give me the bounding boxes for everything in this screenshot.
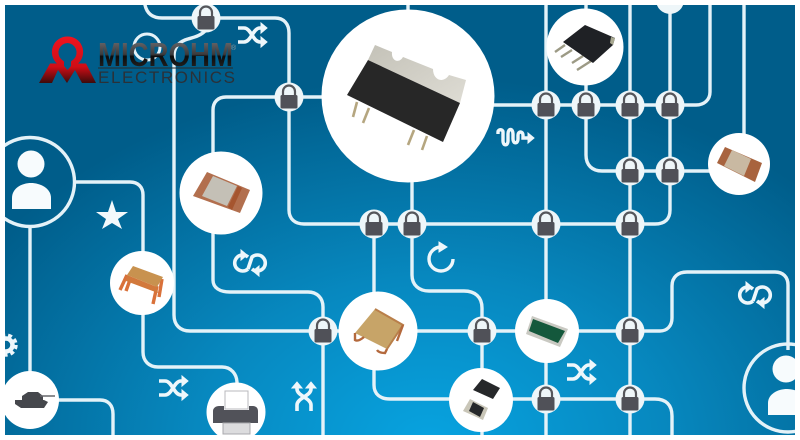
icon: shuffle top [238, 23, 267, 47]
icon: top edge node [657, 5, 683, 14]
icon: tank [1, 371, 59, 429]
logo wordmark: ELECTRONICS: ELECTRONICS [98, 68, 235, 87]
product: chip resistor left [180, 152, 262, 234]
product: green thick-film resistor [515, 299, 579, 363]
icon: person left [0, 138, 74, 226]
product: TO-247 power resistor [546, 8, 624, 86]
product: copper bridge shunt [110, 251, 174, 315]
logo registered mark: ® [231, 44, 237, 52]
icon: star [96, 200, 128, 229]
logo: Microhm Electronics [39, 36, 237, 87]
logo mark: red omega [39, 36, 96, 83]
logo wordmark: MICROHM: MICROHM [98, 36, 233, 73]
icon: vertical shuffle [292, 382, 316, 411]
icon: gear [0, 335, 16, 355]
logo underline [98, 68, 233, 69]
icon: wave arrow [498, 130, 534, 145]
icon: loop right [740, 282, 770, 308]
icon: shuffle lower right [567, 360, 596, 384]
product: small chip resistor right [708, 133, 770, 195]
lock nodes [192, 4, 684, 414]
product: metal strip shunt [338, 292, 418, 370]
product: large SIP shunt resistor [322, 10, 494, 182]
icon: person right [744, 344, 800, 432]
icon: printer [206, 382, 266, 440]
icon: circular arrow behind logo [134, 34, 160, 60]
icon: loop left [235, 250, 265, 276]
icon: shuffle lower left [159, 376, 188, 400]
product: black SMD chips [449, 368, 513, 432]
icon: circular arrow [429, 242, 453, 271]
